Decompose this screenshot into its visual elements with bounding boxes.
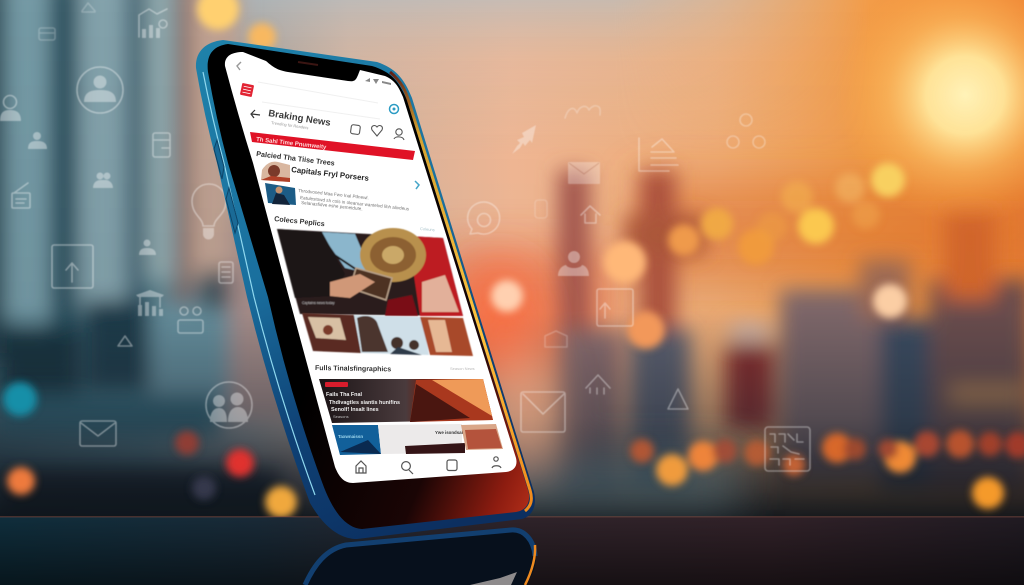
view all link: Season News [450,366,475,371]
phone frame [196,40,535,539]
phone bezel [208,44,529,529]
side buttons [214,140,238,233]
icon: triangle [668,389,688,409]
section heading: Palcied Tha Tiise Trees [256,149,335,168]
yellow edge [390,72,531,511]
story paragraph [298,188,410,212]
section heading: infographics: Fulls Tinalsfingraphics [315,365,391,373]
story paragraph: Eatulestowd sh cols in olearnar wantelvd lihh alivdeus [300,195,410,212]
left towers [0,0,300,520]
bottom cards [332,424,503,455]
subheading: Trending for Readers [271,120,309,130]
phone screen [225,52,517,483]
feature card: Senolf! Insalt lines [331,407,379,413]
nav: home [356,461,366,473]
play icon [390,104,398,114]
feature card: Thdivagtles siantis hunifins [329,400,400,406]
feature card: Fails Tha Fnal [326,392,362,398]
notch speaker [298,62,318,65]
icon: small person [28,132,47,149]
feature card [319,379,493,423]
icon: person pair [93,172,113,188]
icon: small mail [545,331,567,347]
story paragraph: Selanasfidve eshe pemetdute. [301,200,363,211]
story thumbnail 2 [265,183,296,205]
icon: rocket [512,125,536,154]
bottom cards: Taxwnaissn [338,434,363,439]
icon: solid envelope [568,162,600,184]
ground glow [460,260,740,510]
search field [258,82,380,119]
icon: house outline [586,375,610,394]
header action icons [350,124,404,140]
nav: profile [492,457,501,468]
icon: light bulb [192,184,226,240]
image row [302,313,473,356]
right skyline [558,170,1024,500]
nav: search [402,462,413,474]
chevron [415,181,419,189]
icon: user badge [558,251,589,276]
floating icons right [468,106,810,471]
icon: bank [136,290,164,316]
icon: tower chart [639,138,678,171]
floating icons left [0,3,252,446]
icon: chat ring [468,202,500,234]
phone [196,40,535,539]
large hero image [277,228,463,316]
table surface [0,516,1024,585]
icon: house [581,206,600,223]
phone frame highlight [203,72,315,495]
icon: small person mid [139,240,156,255]
icon: warning triangle [118,336,132,346]
icon: envelope [80,421,116,446]
menu icon [240,83,254,97]
phone reflection [304,529,536,585]
back arrow [251,110,260,118]
nav: square [447,460,457,470]
icon: house top [82,3,95,12]
red breaking banner [250,132,415,160]
bottom cards: Ywe isondsak [435,430,465,435]
story paragraph: Throdvoned Maa Fwo Inal Pdnewl. [298,188,369,200]
story thumbnail 1 [261,162,290,182]
red breaking banner: Th Sahl Time Pnumweity [256,137,327,151]
icon: briefcase [39,28,55,40]
icon: arrow up box [52,245,93,288]
icon: arrow box right [597,289,633,326]
large hero image: Captains news today [302,301,335,305]
icon: chart top [139,9,167,38]
icon: group circle [206,382,252,428]
icon: large envelope [521,392,565,432]
see all link: Coleuns [420,226,435,232]
orange haze band [430,180,1024,380]
icon: document [153,133,170,157]
icon: code tile [765,427,810,471]
icon: radio [12,183,30,208]
icon: person circle [77,67,123,113]
icon: scribble [565,106,600,118]
back chevron [237,62,241,70]
icon: document tag [535,200,547,218]
icon: calculator [219,262,233,283]
icon: person outline [0,96,21,121]
status icons [365,78,391,85]
icon: gears [727,114,765,148]
story headline: Capitals Fryl Porsers [291,165,370,183]
section heading: popular: Colecs Peplics [274,214,325,228]
icon: group box [178,307,203,333]
bottom navigation [356,457,501,474]
heading: breaking news: Braking News [268,108,331,129]
feature card: Seasons [333,414,349,419]
